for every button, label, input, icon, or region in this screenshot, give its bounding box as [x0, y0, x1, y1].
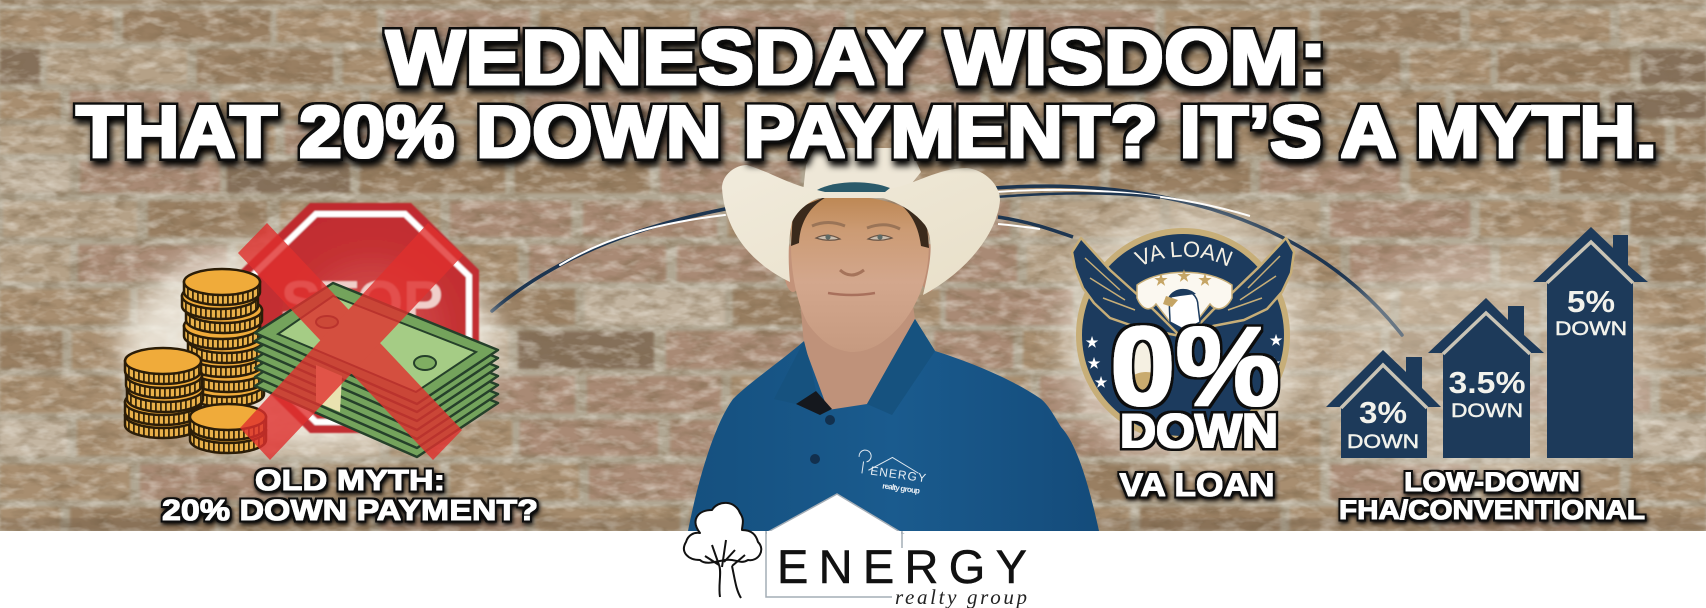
gold stars: ★ [1198, 272, 1212, 289]
caption: VA loan: VA LOAN [1120, 467, 1274, 503]
white shield [1137, 272, 1232, 322]
white stars [1086, 332, 1283, 390]
shirt [688, 319, 1099, 531]
house: 3.5% down: DOWN [1451, 401, 1523, 422]
eagle wings [1072, 238, 1294, 336]
shirt logo: ENERGY [869, 464, 927, 485]
white stars: ★ [1088, 355, 1101, 371]
house: 5% down: 5% [1567, 284, 1615, 319]
collar placket [796, 391, 832, 415]
cowboy hat [722, 148, 1000, 295]
logo tree [684, 503, 761, 598]
illustration: stop sign, coins and cash crossed out [120, 203, 500, 460]
caption: low-down FHA/conventional [1339, 467, 1645, 525]
shirt logo: realty group [882, 481, 921, 496]
white stars: ★ [1095, 374, 1108, 390]
houses chart [1326, 227, 1648, 458]
icon: stop sign [241, 203, 479, 433]
collar [774, 319, 935, 415]
buttons [810, 415, 835, 464]
big figure: 0% down: 0% [1110, 304, 1280, 429]
eagle head [1163, 289, 1200, 330]
white footer band [0, 531, 1706, 608]
face [784, 195, 938, 352]
white stars: ★ [1270, 332, 1283, 348]
logo wordmark: ENERGY [777, 540, 1027, 593]
house: 3% down: DOWN [1347, 432, 1419, 453]
icon: stack of cash [255, 283, 498, 457]
company logo [684, 494, 1027, 608]
caption: low-down FHA/conventional: LOW-DOWN [1404, 467, 1580, 497]
curved arcs right [995, 186, 1402, 335]
zero counter backdrop [1123, 329, 1171, 401]
badge ring [1076, 228, 1290, 442]
white stars: ★ [1086, 334, 1099, 350]
neck [800, 285, 915, 410]
badge title: VA LOAN [1134, 242, 1233, 266]
logo house outline [766, 494, 902, 597]
house: 5% down [1533, 227, 1648, 458]
icon: small coin stack [190, 404, 266, 453]
white stars: ★ [1268, 355, 1281, 371]
man in cowboy hat and blue polo [688, 148, 1099, 531]
icon: red X [238, 223, 463, 460]
caption: old myth [162, 465, 538, 527]
title [76, 15, 1657, 173]
caption: low-down FHA/conventional: FHA/CONVENTIONAL [1339, 495, 1645, 525]
gold stars: ★ [1177, 268, 1191, 285]
VA loan badge [1044, 194, 1322, 474]
glow behind houses [1320, 250, 1660, 490]
big figure: 0% down: DOWN [1120, 404, 1278, 457]
icon: tall coin stack [182, 269, 266, 407]
wing feathers [1085, 256, 1280, 310]
curved arc left [492, 209, 725, 311]
house: 3% down [1326, 350, 1441, 458]
icon: short coin stack [125, 348, 203, 438]
title: THAT 20% DOWN PAYMENT? IT’S A MYTH. [76, 92, 1657, 173]
caption: old myth: OLD MYTH: [255, 465, 445, 497]
icon: stop sign: STOP [281, 269, 443, 336]
gold stars: ★ [1154, 272, 1168, 289]
gold stars [1154, 268, 1212, 289]
house: 3% down: 3% [1359, 395, 1407, 430]
caption: old myth: 20% DOWN PAYMENT? [162, 495, 538, 527]
house: 3.5% down [1428, 298, 1544, 458]
house: 5% down: DOWN [1555, 319, 1627, 340]
shirt logo [855, 449, 929, 496]
title: WEDNESDAY WISDOM: [386, 15, 1327, 101]
house: 3.5% down: 3.5% [1448, 365, 1526, 400]
